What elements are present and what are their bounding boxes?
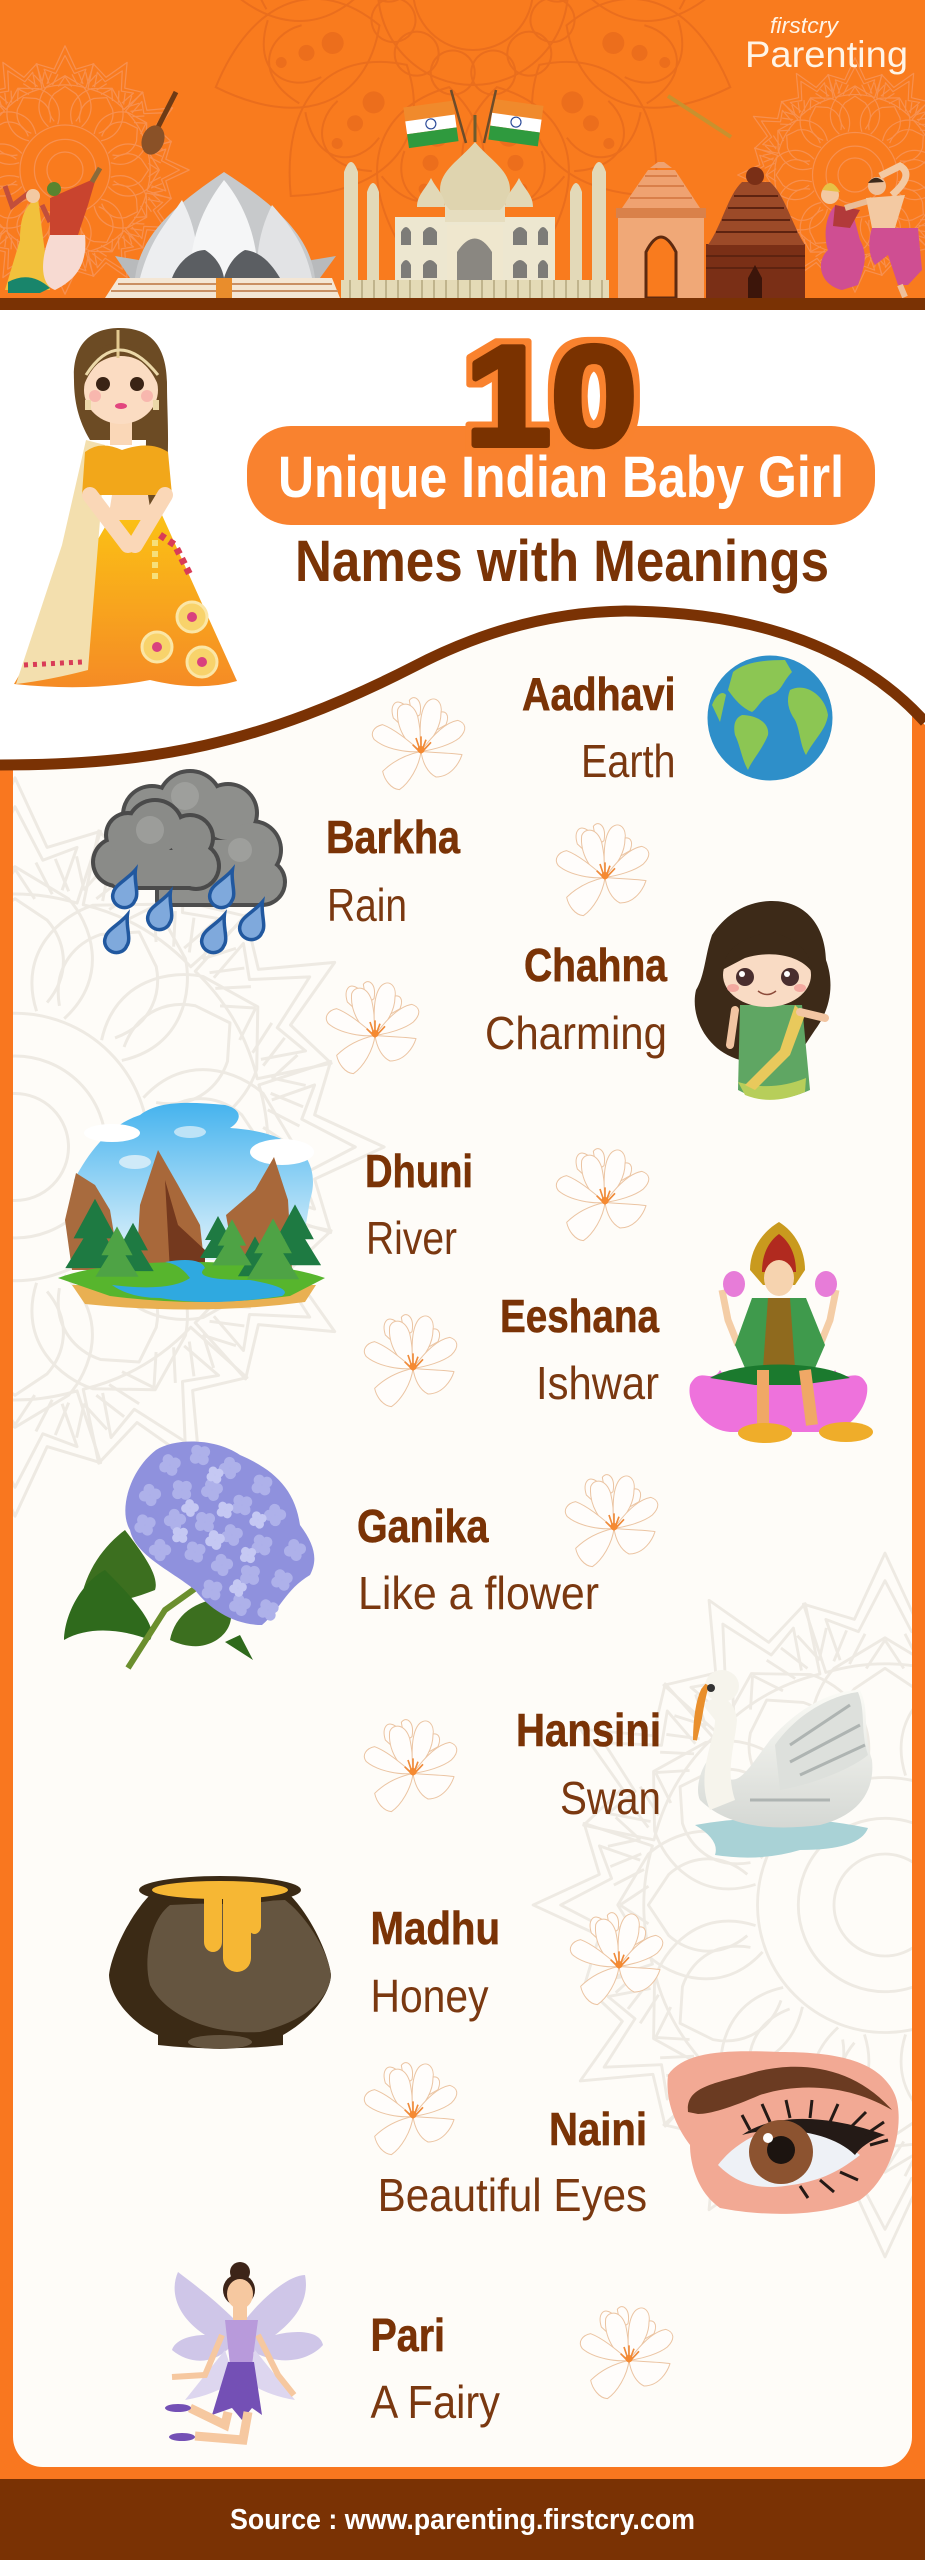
name: Ganika	[357, 1500, 489, 1552]
flower	[570, 1913, 663, 2005]
ground	[72, 1285, 316, 1310]
icon: honey pot	[109, 1876, 331, 2049]
skirt	[14, 515, 237, 687]
header mandala	[214, 0, 732, 238]
flower	[556, 824, 649, 916]
logo: firstcry	[770, 13, 840, 38]
icon: left dancers	[5, 168, 100, 293]
logo: Parenting	[745, 34, 908, 75]
header banner	[0, 0, 925, 301]
meaning: Ishwar	[536, 1357, 659, 1409]
icon: swan	[695, 1670, 872, 1858]
arms	[172, 2335, 294, 2395]
entry: Barkha	[91, 769, 649, 956]
back cloud outline	[121, 769, 287, 907]
flower	[364, 1315, 457, 1407]
entry: Dhuni	[58, 1103, 649, 1310]
meaning: Honey	[370, 1970, 488, 2022]
logo	[748, 17, 906, 74]
trees	[65, 1199, 321, 1276]
flower head base	[125, 1442, 314, 1625]
neck and face	[110, 415, 132, 445]
meaning: River	[366, 1212, 457, 1264]
name: Madhu	[370, 1902, 500, 1954]
cloud highlights	[136, 782, 252, 862]
icon: hydrangea	[64, 1442, 314, 1668]
icon: fairy	[165, 2262, 323, 2441]
clouds	[84, 1124, 140, 1142]
flower	[364, 2063, 457, 2155]
title pill	[247, 426, 875, 525]
slippers	[165, 2404, 191, 2412]
panel side and bottom border	[0, 712, 925, 2480]
hair back	[74, 328, 168, 526]
meaning: A Fairy	[370, 2376, 500, 2428]
legs	[763, 1370, 812, 1425]
flower	[556, 1149, 649, 1241]
cream panel	[0, 611, 925, 2480]
name: Naini	[549, 2103, 647, 2155]
girl illustration	[14, 328, 237, 687]
meaning: Earth	[581, 735, 676, 787]
front cloud outline	[91, 798, 221, 891]
name: Eeshana	[500, 1290, 659, 1342]
number 10: 10	[465, 317, 637, 476]
eyebrow	[688, 2067, 892, 2114]
lotus	[689, 1370, 867, 1432]
hair	[230, 2262, 250, 2282]
flower	[372, 698, 465, 790]
iris	[749, 2120, 813, 2184]
icon: girl in green saree	[695, 901, 830, 1100]
title line white: Unique Indian Baby Girl	[278, 445, 844, 510]
neck and head	[703, 1698, 737, 1810]
body	[698, 1690, 872, 1827]
torso	[735, 1298, 825, 1368]
lashes	[742, 2119, 885, 2155]
wings	[172, 2272, 235, 2361]
source text: Source : www.parenting.firstcry.com	[230, 2504, 695, 2536]
entry: Hansini	[364, 1670, 872, 1858]
meaning: Swan	[560, 1772, 661, 1824]
icon: goddess on lotus	[689, 1222, 873, 1443]
skirt medallions	[177, 602, 207, 632]
icon: India Gate	[616, 162, 706, 298]
meaning: Beautiful Eyes	[378, 2169, 647, 2221]
icon: river landscape	[58, 1103, 325, 1310]
meaning: Rain	[327, 879, 407, 931]
entry: Naini	[364, 2051, 899, 2221]
icon: right dancers	[821, 166, 922, 297]
upper lotuses and arms	[722, 1290, 836, 1345]
entry: Ganika	[64, 1442, 658, 1668]
meaning: Charming	[485, 1007, 667, 1059]
feet bowls	[738, 1423, 792, 1443]
leaves	[80, 1530, 156, 1605]
entry: Aadhavi	[372, 656, 832, 790]
entry: Pari	[165, 2262, 673, 2441]
icon: beautiful eye	[667, 2051, 899, 2214]
icon: sun temple	[706, 167, 805, 298]
icon: left flag	[403, 101, 459, 148]
arms	[90, 495, 165, 545]
background mandalas	[0, 758, 925, 2276]
flower	[565, 1475, 658, 1567]
name: Pari	[370, 2309, 445, 2361]
flower	[364, 1720, 457, 1812]
river	[112, 1260, 285, 1302]
icon: minarets	[344, 162, 606, 282]
icon: rain cloud	[91, 769, 287, 956]
honey drips	[204, 1890, 261, 1972]
front cloud fill	[95, 802, 217, 887]
entry: Madhu	[109, 1876, 663, 2049]
icon: right flag	[488, 99, 544, 146]
crown halo	[750, 1222, 805, 1285]
flower	[326, 982, 419, 1074]
meaning: Like a flower	[358, 1567, 599, 1619]
icon: flute	[668, 96, 731, 137]
header base stripe	[0, 298, 925, 310]
entry: Chahna	[326, 901, 830, 1100]
title line brown: Names with Meanings	[295, 529, 829, 594]
icon: sitar	[138, 92, 176, 158]
icon: lotus temple	[105, 172, 340, 298]
torso	[233, 2305, 247, 2325]
icon: Taj Mahal	[341, 115, 609, 298]
eye white	[718, 2125, 860, 2187]
back cloud fill	[125, 773, 283, 903]
footer	[0, 2479, 925, 2560]
name: Dhuni	[365, 1145, 473, 1197]
name: Barkha	[326, 811, 460, 863]
skirt	[212, 2362, 262, 2420]
icon: Indian flags	[403, 90, 544, 148]
water	[695, 1818, 868, 1858]
name: Aadhavi	[522, 668, 676, 720]
garland	[160, 535, 190, 575]
mountains	[65, 1173, 120, 1270]
name: Chahna	[524, 939, 667, 991]
title	[247, 317, 875, 594]
legs	[190, 2408, 248, 2440]
head	[764, 1260, 794, 1296]
wave divider	[0, 611, 925, 765]
rain drops	[109, 865, 146, 911]
head	[227, 2279, 253, 2309]
flower	[580, 2307, 673, 2399]
florets	[133, 1444, 308, 1622]
side mandalas	[0, 39, 925, 301]
dupatta	[16, 440, 105, 684]
name: Hansini	[516, 1704, 661, 1756]
icon: earth globe	[708, 656, 832, 780]
entry: Eeshana	[364, 1222, 873, 1443]
blouse	[82, 445, 172, 495]
